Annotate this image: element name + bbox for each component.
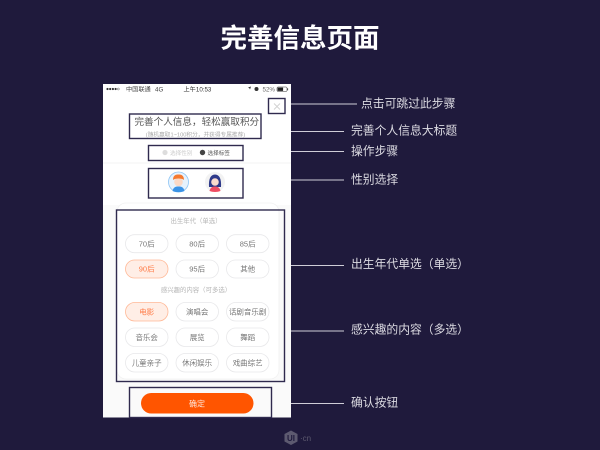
annotation: heading: 完善个人信息大标题 xyxy=(351,124,457,138)
birth era options: 70后 xyxy=(139,238,155,248)
section label: birth era: 出生年代（单选） xyxy=(170,216,222,225)
annotation: skip: 点击可跳过此步骤 xyxy=(361,96,456,110)
birth era options: 95后 xyxy=(189,264,206,274)
title: 完善信息页面 xyxy=(220,24,380,54)
steps: 选择性别 xyxy=(170,149,193,157)
annotation: gender: 性别选择 xyxy=(351,172,398,186)
icon: female avatar xyxy=(205,172,225,192)
confirm button xyxy=(141,393,254,414)
panel: phone screen xyxy=(103,84,291,418)
steps xyxy=(162,149,230,157)
interest options: 演唱会 xyxy=(186,306,209,316)
annotation: gender xyxy=(291,172,398,186)
status bar: 4G xyxy=(155,86,163,94)
page heading: 完善个人信息，轻松赢取积分 xyxy=(134,116,260,128)
birth era options: 其他 xyxy=(240,264,256,274)
logo: UI.cn xyxy=(284,430,311,445)
annotation: birth era: 出生年代单选（单选） xyxy=(351,257,469,271)
annotation: steps: 操作步骤 xyxy=(351,144,398,158)
annotation: steps xyxy=(291,144,398,158)
status bar: 中国联通 xyxy=(126,86,151,94)
annotation: interests: 感兴趣的内容（多选） xyxy=(351,322,469,336)
birth era options: 85后 xyxy=(240,238,256,248)
interest options: 话剧音乐剧 xyxy=(229,306,266,316)
interest options: 戏曲综艺 xyxy=(233,357,263,367)
icon: close xyxy=(274,104,280,110)
status bar: 上午10:53 xyxy=(184,86,212,94)
interest options: 音乐会 xyxy=(135,332,158,342)
interest options: 舞蹈 xyxy=(240,332,256,342)
annotation: confirm: 确认按钮 xyxy=(351,396,398,410)
interest options: 电影 xyxy=(139,306,155,316)
steps: 选择标签 xyxy=(208,149,230,157)
confirm button: 确定 xyxy=(189,398,205,408)
section label: interests: 感兴趣的内容（可多选） xyxy=(161,285,231,294)
interest options: 展览 xyxy=(190,332,205,342)
status bar: 52% xyxy=(262,86,275,94)
page subheading: (随机赢取1~100积分，并获得专属推荐) xyxy=(146,131,245,139)
birth era options: 90后 xyxy=(139,264,155,274)
status bar xyxy=(106,86,288,94)
logo: UI.cn: ·cn xyxy=(300,434,311,443)
interest options: 儿童亲子 xyxy=(132,357,162,367)
birth era options: 80后 xyxy=(189,238,206,248)
interest options: 休闲娱乐 xyxy=(182,357,213,367)
icon: male avatar xyxy=(168,172,188,192)
annotation: confirm xyxy=(291,396,398,410)
white options card xyxy=(117,203,279,379)
highlight boxes xyxy=(116,98,285,418)
birth era options xyxy=(126,235,269,278)
interest options xyxy=(126,302,269,372)
logo: UI.cn: UI xyxy=(287,434,295,443)
